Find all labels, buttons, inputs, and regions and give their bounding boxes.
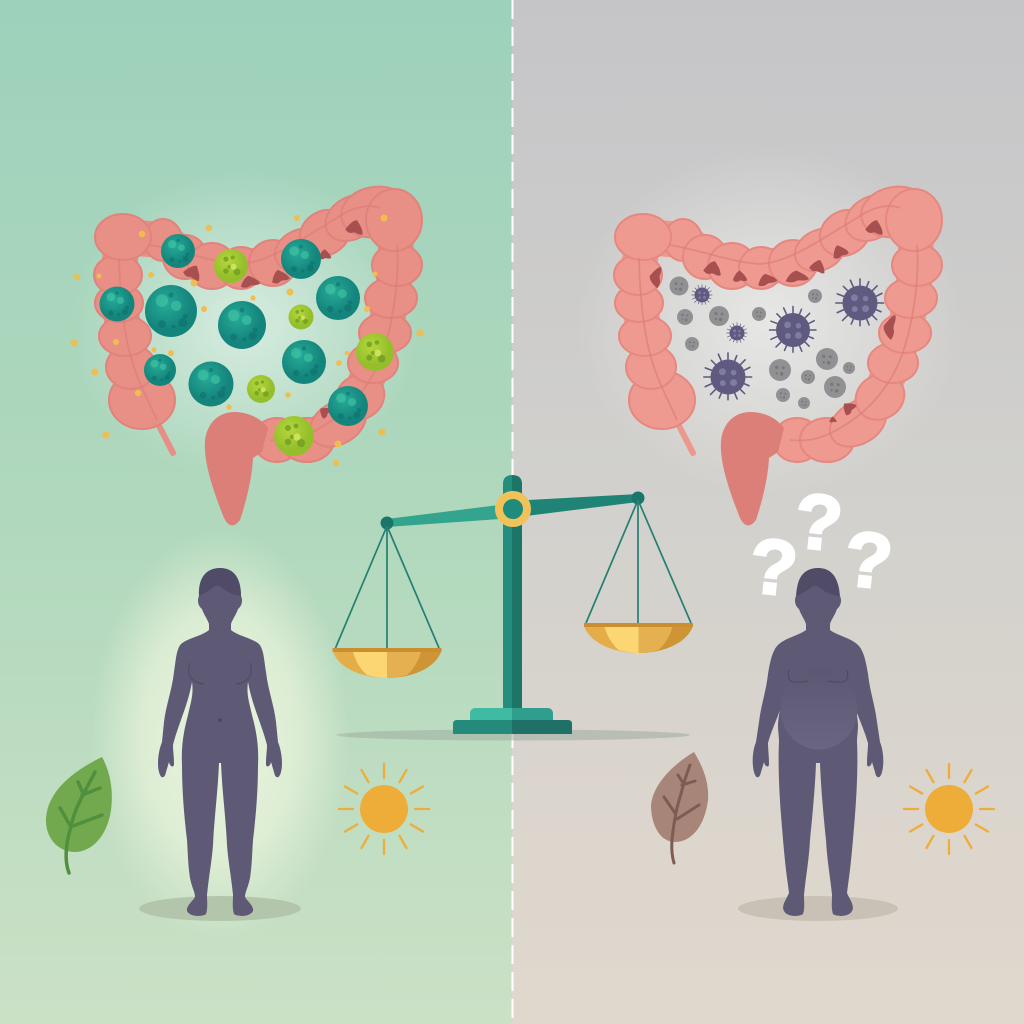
left pan [332, 648, 442, 678]
healthy colon illustration [70, 181, 424, 526]
background: unhealthy side [512, 0, 1024, 1024]
harmful spiked viruses [692, 279, 884, 400]
unhealthy colon illustration [614, 181, 942, 526]
balance scale [332, 475, 693, 740]
icon: green leaf [46, 757, 112, 873]
scale post [503, 475, 522, 708]
icon: question marks [745, 476, 897, 613]
icon: question marks: ? [745, 521, 802, 613]
scale base shadow [336, 730, 690, 740]
golden particles [70, 214, 424, 466]
icon: question marks: ? [790, 476, 847, 568]
icon: unhealthy side sun [904, 764, 994, 854]
unhealthy larger body silhouette [738, 568, 898, 921]
beneficial bacteria: teal [100, 234, 368, 426]
beneficial bacteria: lime [214, 249, 394, 456]
glow around body [90, 530, 350, 940]
ground shadow [738, 896, 898, 921]
inflammation patches [182, 218, 366, 420]
belly [780, 668, 858, 750]
body contours [788, 670, 848, 682]
glow behind unhealthy colon [575, 145, 965, 495]
healthy slim body silhouette [90, 530, 350, 940]
center dashed divider [512, 0, 514, 1024]
icon: withered brown leaf [651, 752, 708, 863]
right pan strings [586, 500, 691, 623]
right pan [584, 623, 693, 653]
center pivot [499, 495, 527, 523]
grey microbes [670, 276, 855, 409]
glow behind healthy colon [70, 170, 420, 480]
beam ends [380, 492, 644, 530]
scale beam [387, 494, 638, 527]
inflammation patches [648, 218, 897, 422]
left pan strings [336, 526, 439, 648]
icon: healthy side sun [339, 764, 429, 854]
ground shadow [139, 896, 301, 921]
scale base [453, 708, 572, 734]
body contours [189, 663, 251, 684]
icon: question marks: ? [840, 514, 897, 606]
background: healthy side [0, 0, 512, 1024]
